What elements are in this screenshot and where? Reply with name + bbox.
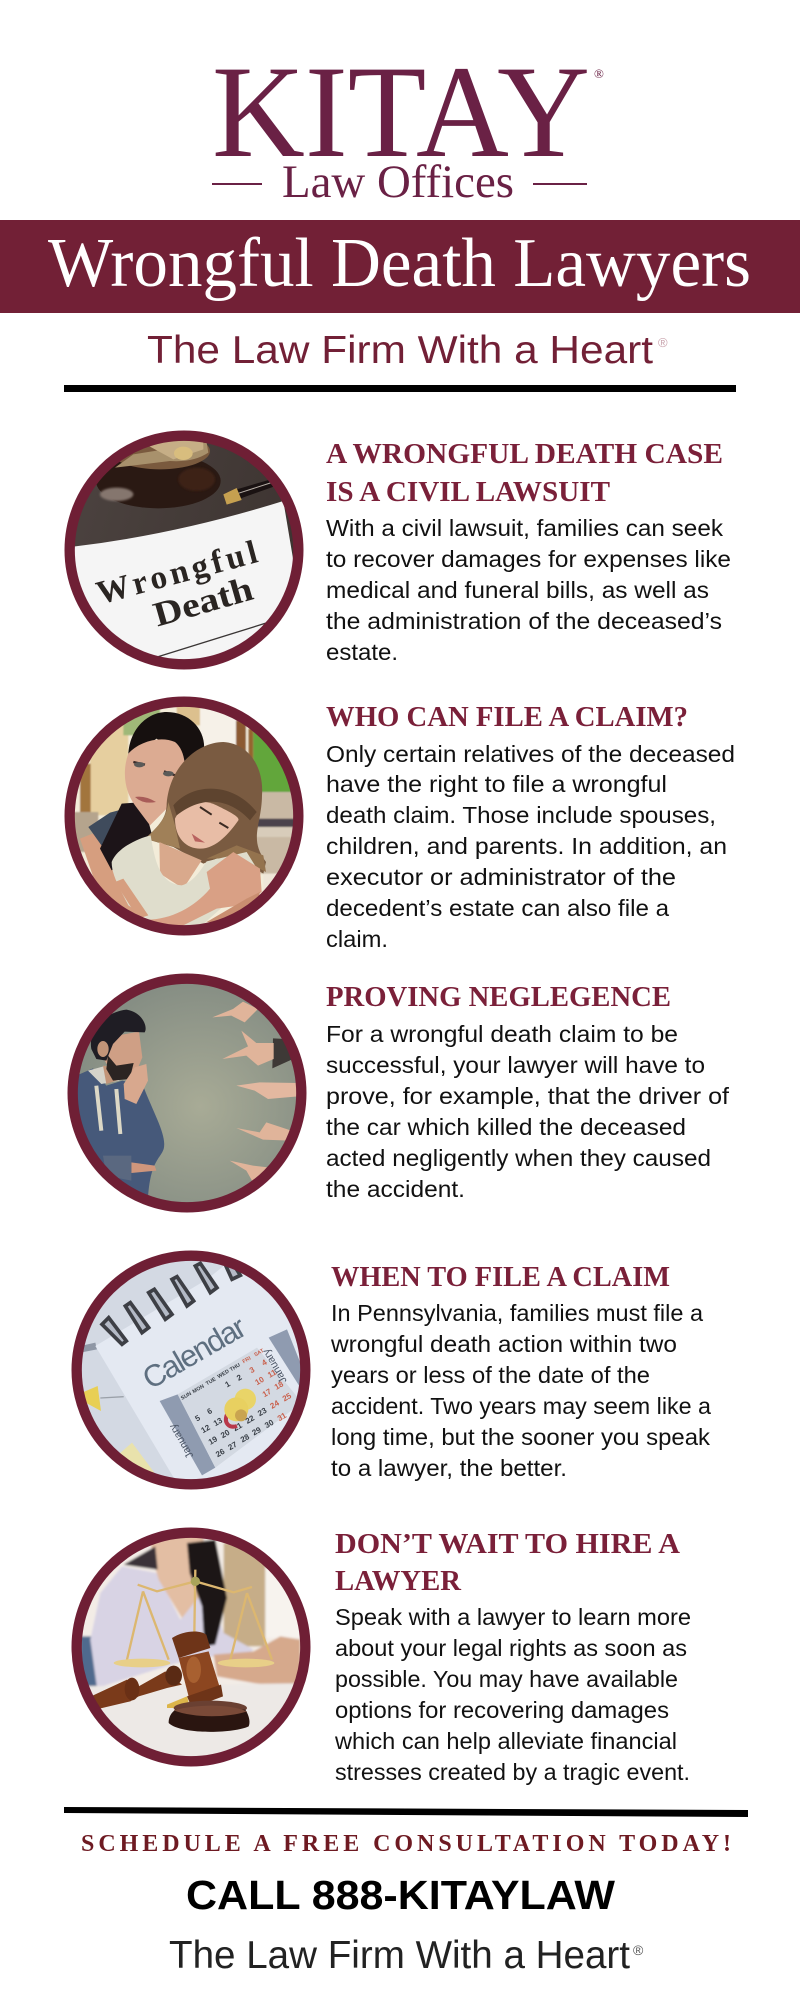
body text: For a wrongful death claim to be — [326, 1021, 678, 1047]
closing tagline: The Law Firm With a Heart — [169, 1934, 630, 1977]
heading: PROVING NEGLEGENCE — [326, 982, 671, 1013]
body text: the administration of the deceased’s — [326, 608, 722, 634]
photo: calendar with yellow pin: SAT — [253, 1348, 266, 1358]
panel: don't wait to hire a lawyer — [67, 1523, 691, 1785]
body text: to a lawyer, the better. — [331, 1455, 567, 1481]
photo: calendar with yellow pin: January — [167, 1421, 196, 1460]
body text — [326, 741, 735, 952]
photo: calendar with yellow pin: 10 — [253, 1375, 266, 1387]
photo: mother hugging daughter — [60, 692, 310, 942]
body text: the accident. — [326, 1176, 465, 1202]
photo: calendar with yellow pin: 20 — [219, 1428, 232, 1440]
photo: wrongful death document: Death — [149, 570, 257, 634]
body text: to recover damages for expenses like — [326, 546, 731, 572]
body text: options for recovering damages — [335, 1697, 669, 1723]
photo: calendar with yellow pin: 26 — [214, 1447, 227, 1459]
photo: calendar with yellow pin: MON — [192, 1384, 206, 1395]
heading: DON’T WAIT TO HIRE A — [335, 1529, 681, 1560]
photo: calendar with yellow pin: 31 — [276, 1411, 289, 1423]
photo: wrongful death document: Wrongful — [92, 534, 261, 612]
body text: accident. Two years may seem like a — [331, 1393, 711, 1419]
title banner: Wrongful Death Lawyers — [48, 225, 751, 302]
phone number: CALL 888-KITAYLAW — [186, 1872, 615, 1918]
body text — [326, 515, 731, 665]
panel: wrongful death case — [60, 426, 731, 679]
photo: calendar with yellow pin: 22 — [244, 1413, 257, 1426]
body text: medical and funeral bills, as well as — [326, 577, 709, 603]
photo: calendar with yellow pin: 21 — [231, 1421, 244, 1433]
photo: calendar with yellow pin: 18 — [273, 1379, 286, 1392]
body text: Only certain relatives of the deceased — [326, 741, 735, 767]
photo: calendar with yellow pin: 17 — [261, 1387, 274, 1399]
photo: calendar with yellow pin: 2 — [235, 1372, 244, 1383]
photo: calendar with yellow pin: 5 — [193, 1413, 202, 1423]
body text: long time, but the sooner you speak — [331, 1424, 711, 1450]
photo: calendar with yellow pin: Calendar — [137, 1310, 252, 1396]
panel: who can file a claim — [60, 692, 735, 952]
photo: calendar with yellow pin: 25 — [281, 1391, 294, 1403]
tagline: The Law Firm With a Heart — [147, 329, 653, 372]
photo: calendar with yellow pin: 19 — [207, 1434, 220, 1447]
body text: acted negligently when they caused — [326, 1145, 711, 1171]
body text: which can help alleviate financial — [334, 1728, 677, 1754]
heading: WHO CAN FILE A CLAIM? — [326, 702, 688, 733]
closing tagline: ® — [633, 1942, 644, 1958]
photo: calendar with yellow pin: 1 — [223, 1379, 232, 1389]
photo: calendar with yellow pin: WED — [217, 1369, 231, 1380]
body text — [330, 1300, 711, 1481]
body text: wrongful death action within two — [330, 1331, 677, 1357]
panel: proving negligence — [63, 969, 730, 1219]
photo: wrongful death document — [64, 430, 304, 670]
body text — [334, 1604, 691, 1785]
photo: calendar with yellow pin: 3 — [248, 1365, 257, 1375]
body text: estate. — [326, 639, 398, 665]
heading: LAWYER — [335, 1566, 462, 1597]
photo: man with pointing hands — [63, 969, 313, 1219]
schedule heading: SCHEDULE A FREE CONSULTATION TODAY! — [81, 1831, 731, 1857]
heading — [335, 1529, 681, 1597]
photo: calendar with yellow pin: 4 — [260, 1357, 269, 1368]
photo: calendar with yellow pin — [72, 1250, 310, 1490]
body text: claim. — [326, 926, 388, 952]
body text: stresses created by a tragic event. — [335, 1759, 690, 1785]
photo: calendar with yellow pin: 13 — [212, 1416, 225, 1428]
body text: possible. You may have available — [335, 1666, 678, 1692]
photo: calendar with yellow pin: FRI — [242, 1355, 253, 1365]
body text: successful, your lawyer will have to — [326, 1052, 705, 1078]
body text: years or less of the date of the — [331, 1362, 650, 1388]
body text: children, and parents. In addition, an — [326, 833, 727, 859]
body text — [326, 1021, 730, 1202]
heading — [326, 439, 723, 508]
photo: calendar with yellow pin: January — [260, 1346, 290, 1385]
body text: have the right to file a wrongful — [326, 771, 667, 797]
body text: about your legal rights as soon as — [335, 1635, 687, 1661]
heading: A WRONGFUL DEATH CASE — [326, 439, 723, 470]
logo: Kitay Law Offices: Law Offices — [282, 156, 514, 208]
logo: Kitay Law Offices: KITAY — [212, 38, 590, 185]
photo: calendar with yellow pin: 29 — [250, 1425, 263, 1437]
body text: death claim. Those include spouses, — [326, 802, 716, 828]
heading: IS A CIVIL LAWSUIT — [326, 477, 610, 508]
body text: prove, for example, that the driver of — [326, 1083, 730, 1109]
body text: Speak with a lawyer to learn more — [335, 1604, 691, 1630]
photo: calendar with yellow pin: 12 — [199, 1423, 212, 1435]
body text: the car which killed the deceased — [326, 1114, 686, 1140]
body text: With a civil lawsuit, families can seek — [326, 515, 724, 541]
logo: Kitay Law Offices: ® — [594, 66, 604, 81]
tagline: ® — [658, 335, 668, 350]
photo: calendar with yellow pin: 27 — [226, 1440, 239, 1452]
photo: calendar with yellow pin: THU — [229, 1362, 242, 1373]
photo: calendar with yellow pin: 11 — [266, 1367, 278, 1380]
photo: calendar with yellow pin: 23 — [256, 1406, 269, 1418]
panel: when to file a claim — [72, 1250, 711, 1490]
heading: WHEN TO FILE A CLAIM — [331, 1262, 670, 1293]
call to action — [81, 1831, 731, 1977]
body text: In Pennsylvania, families must file a — [331, 1300, 703, 1326]
body text: decedent’s estate can also file a — [326, 895, 669, 921]
photo: calendar with yellow pin: 24 — [268, 1398, 281, 1411]
photo: calendar with yellow pin: TUE — [205, 1376, 218, 1387]
photo: calendar with yellow pin: 6 — [205, 1406, 214, 1416]
photo: calendar with yellow pin: 30 — [263, 1418, 276, 1430]
photo: calendar with yellow pin: SUN — [180, 1391, 193, 1402]
body text: executor or administrator of the — [326, 864, 676, 890]
photo: calendar with yellow pin: 28 — [239, 1432, 252, 1444]
photo: gavel and scales — [72, 1528, 310, 1766]
